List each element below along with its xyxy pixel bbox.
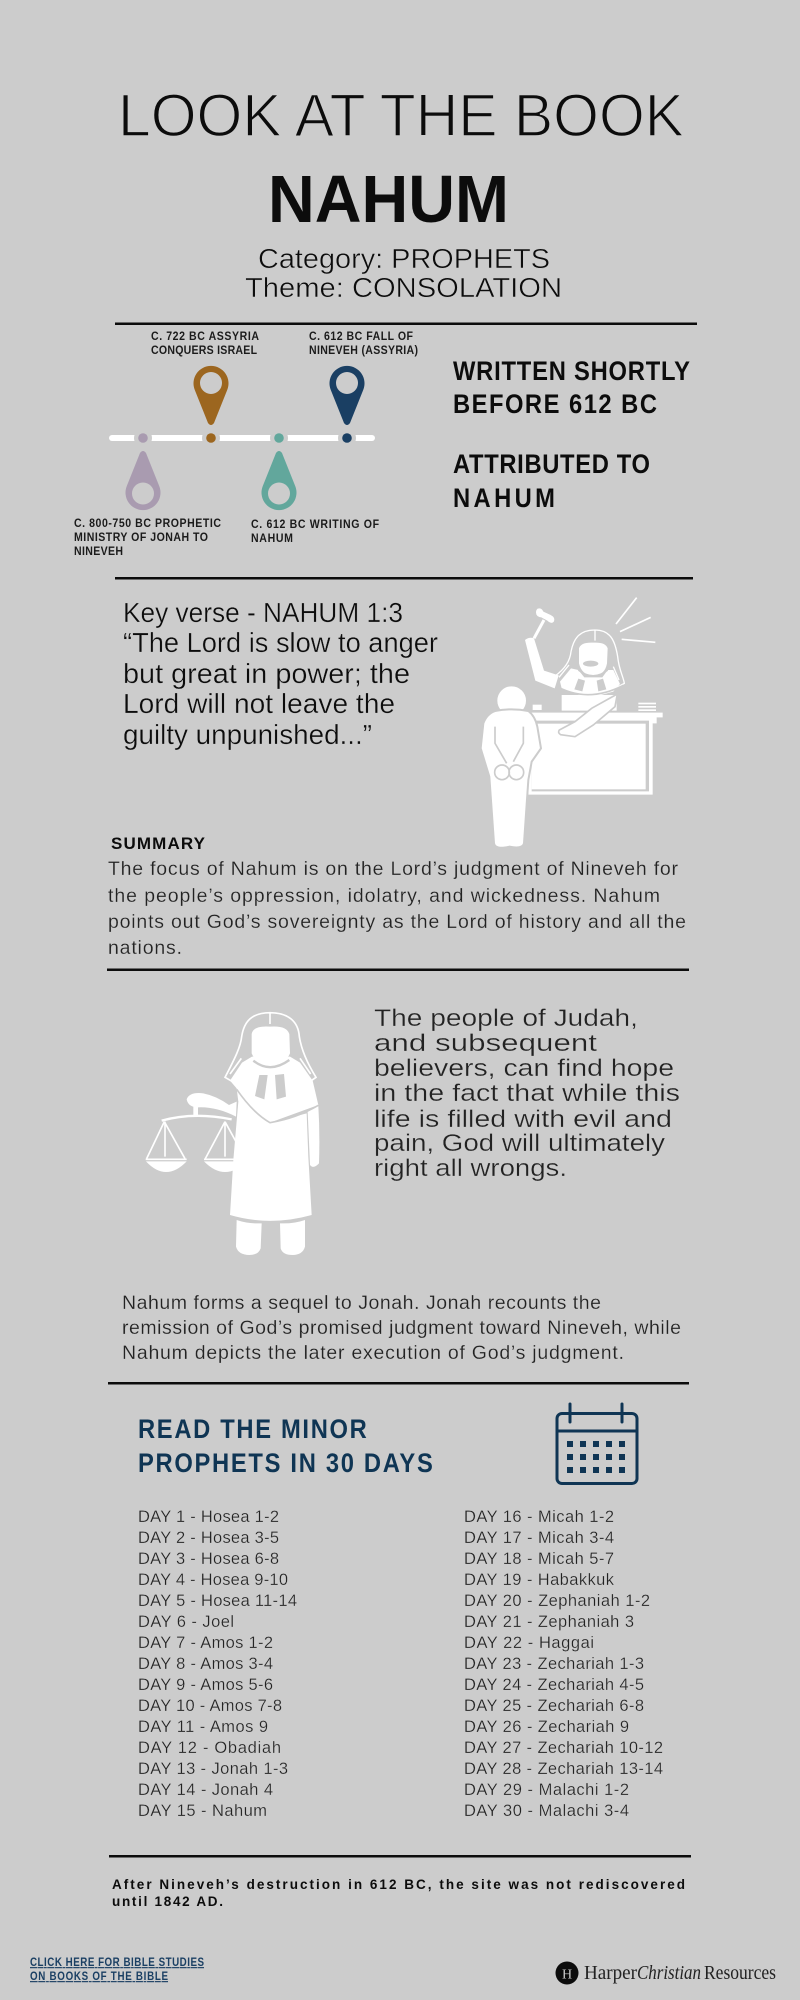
timeline [74,330,418,558]
reading list: days 16-30: DAY 23 - Zechariah 1-3 [464,1655,644,1673]
reading list: days 16-30: DAY 17 - Micah 3-4 [464,1529,614,1547]
subtitle: category and theme: Theme: CONSOLATION [245,272,562,303]
logo: HarperChristian Resources: H [562,1968,572,1982]
sequel paragraph: remission of God’s promised judgment toward Nineveh, while [122,1317,681,1339]
hope text: pain, God will ultimately [374,1130,665,1157]
reading list: days 1-15: DAY 9 - Amos 5-6 [138,1676,273,1694]
hope text: and subsequent [374,1030,597,1057]
summary text: nations. [108,937,182,959]
robe [230,1102,319,1255]
label: 612 BC writing: NAHUM [251,532,293,545]
reading list: days 1-15: DAY 3 - Hosea 6-8 [138,1550,279,1568]
reading list: days 16-30: DAY 18 - Micah 5-7 [464,1550,614,1568]
pin: c. 800-750 BC [126,451,160,510]
date and author: ATTRIBUTED TO [453,450,650,479]
closing fact: until 1842 AD. [112,1894,223,1909]
label: 612 BC writing [251,518,379,545]
key verse: Lord will not leave the [123,688,395,719]
link: Bible studies [30,1956,204,1983]
reading list: days 16-30: DAY 22 - Haggai [464,1634,594,1652]
summary heading: SUMMARY [111,834,206,853]
label: 612 BC fall: C. 612 BC FALL OF [309,330,413,343]
reading list: days 1-15: DAY 10 - Amos 7-8 [138,1697,282,1715]
closing fact: After Nineveh’s destruction in 612 BC, the site was not rediscovered [112,1877,685,1892]
reading list: days 16-30: DAY 29 - Malachi 1-2 [464,1781,629,1799]
reading list: days 16-30: DAY 28 - Zechariah 13-14 [464,1760,663,1778]
key verse: but great in power; the [123,658,410,689]
reading list: days 1-15: DAY 5 - Hosea 11-14 [138,1592,297,1610]
label: 722 BC: CONQUERS ISRAEL [151,344,257,357]
key verse [123,597,438,750]
reading list: days 16-30: DAY 24 - Zechariah 4-5 [464,1676,644,1694]
label: 612 BC fall: NINEVEH (ASSYRIA) [309,344,418,357]
reading list: days 1-15: DAY 8 - Amos 3-4 [138,1655,273,1673]
heading: Nahum: NAHUM [268,162,509,237]
label: 800-750 BC: C. 800-750 BC PROPHETIC [74,517,221,530]
reading list: days 16-30: DAY 16 - Micah 1-2 [464,1508,614,1526]
title: Look at the Book: LOOK AT THE BOOK [118,82,684,149]
action lines [616,598,655,642]
summary text: the people’s oppression, idolatry, and wickedness. Nahum [108,885,660,907]
label: 800-750 BC: NINEVEH [74,545,123,558]
defendant [481,685,541,848]
sequel paragraph [122,1292,681,1364]
reading plan heading: READ THE MINOR [138,1415,367,1444]
label: 722 BC [151,330,259,357]
reading list: days 16-30: DAY 20 - Zephaniah 1-2 [464,1592,650,1610]
reading list: days 16-30 [464,1508,663,1820]
pin: c. 612 BC fall of Nineveh [330,366,364,425]
reading list: days 1-15: DAY 14 - Jonah 4 [138,1781,273,1799]
link: Bible studies: ON BOOKS OF THE BIBLE [30,1970,168,1983]
pin: c. 722 BC [194,366,228,425]
reading list: days 16-30: DAY 19 - Habakkuk [464,1571,615,1589]
wig and collar [225,1013,318,1123]
logo: HarperChristian Resources: Christian [637,1962,701,1984]
closing fact [112,1877,685,1909]
reading list: days 1-15: DAY 11 - Amos 9 [138,1718,268,1736]
icon: calendar [557,1404,637,1484]
timeline bar [109,429,375,447]
hope text: right all wrongs. [374,1155,567,1182]
scales [146,1116,247,1172]
reading list: days 1-15: DAY 7 - Amos 1-2 [138,1634,273,1652]
summary text: points out God’s sovereignty as the Lord of history and all the [108,911,686,933]
logo: HarperChristian Resources: Resources [704,1962,776,1984]
subtitle: category and theme: Category: PROPHETS [258,243,550,274]
icon: judge with scales [146,1013,319,1255]
key verse: “The Lord is slow to anger [123,627,438,658]
reading list: days 16-30: DAY 26 - Zechariah 9 [464,1718,629,1736]
label: 722 BC: C. 722 BC ASSYRIA [151,330,259,343]
reading list: days 16-30: DAY 21 - Zephaniah 3 [464,1613,634,1631]
hope text: life is filled with evil and [374,1106,672,1133]
date and author: BEFORE 612 BC [453,390,657,419]
arm with hand [187,1093,237,1117]
pin: c. 612 BC writing of Nahum [262,451,296,510]
sequel paragraph: Nahum depicts the later execution of God’s judgment. [122,1342,624,1364]
reading list: days 1-15: DAY 13 - Jonah 1-3 [138,1760,288,1778]
hope text: The people of Judah, [374,1005,638,1032]
reading list: days 1-15: DAY 4 - Hosea 9-10 [138,1571,288,1589]
summary text [108,858,686,959]
label: 612 BC fall [309,330,418,357]
label: 612 BC writing: C. 612 BC WRITING OF [251,518,379,531]
reading list: days 1-15: DAY 6 - Joel [138,1613,234,1631]
subtitle: category and theme [245,243,562,303]
reading list: days 16-30: DAY 30 - Malachi 3-4 [464,1802,629,1820]
reading list: days 1-15 [138,1508,297,1820]
reading list: days 16-30: DAY 25 - Zechariah 6-8 [464,1697,644,1715]
summary text: The focus of Nahum is on the Lord’s judgment of Nineveh for [108,858,678,880]
desk [528,703,663,795]
link: Bible studies: CLICK HERE FOR BIBLE STUDIES [30,1956,204,1969]
hope text: in the fact that while this [374,1080,680,1107]
date and author [453,357,690,513]
reading list: days 1-15: DAY 2 - Hosea 3-5 [138,1529,279,1547]
judge [525,608,624,737]
reading plan heading [138,1415,433,1478]
date and author: WRITTEN SHORTLY [453,357,690,386]
icon: judge and defendant [481,598,663,848]
sequel paragraph: Nahum forms a sequel to Jonah. Jonah recounts the [122,1292,601,1314]
reading list: days 1-15: DAY 12 - Obadiah [138,1739,281,1757]
reading list: days 16-30: DAY 27 - Zechariah 10-12 [464,1739,663,1757]
logo: HarperChristian Resources [556,1962,776,1984]
label: 800-750 BC [74,517,221,558]
logo: HarperChristian Resources: Harper [584,1962,637,1984]
reading list: days 1-15: DAY 1 - Hosea 1-2 [138,1508,279,1526]
hope text: believers, can find hope [374,1055,674,1082]
reading list: days 1-15: DAY 15 - Nahum [138,1802,267,1820]
hope text [374,1005,680,1182]
key verse: guilty unpunished...” [123,719,372,750]
reading plan heading: PROPHETS IN 30 DAYS [138,1449,433,1478]
label: 800-750 BC: MINISTRY OF JONAH TO [74,531,208,544]
date and author: NAHUM [453,484,555,513]
key verse: Key verse - NAHUM 1:3 [123,597,403,628]
